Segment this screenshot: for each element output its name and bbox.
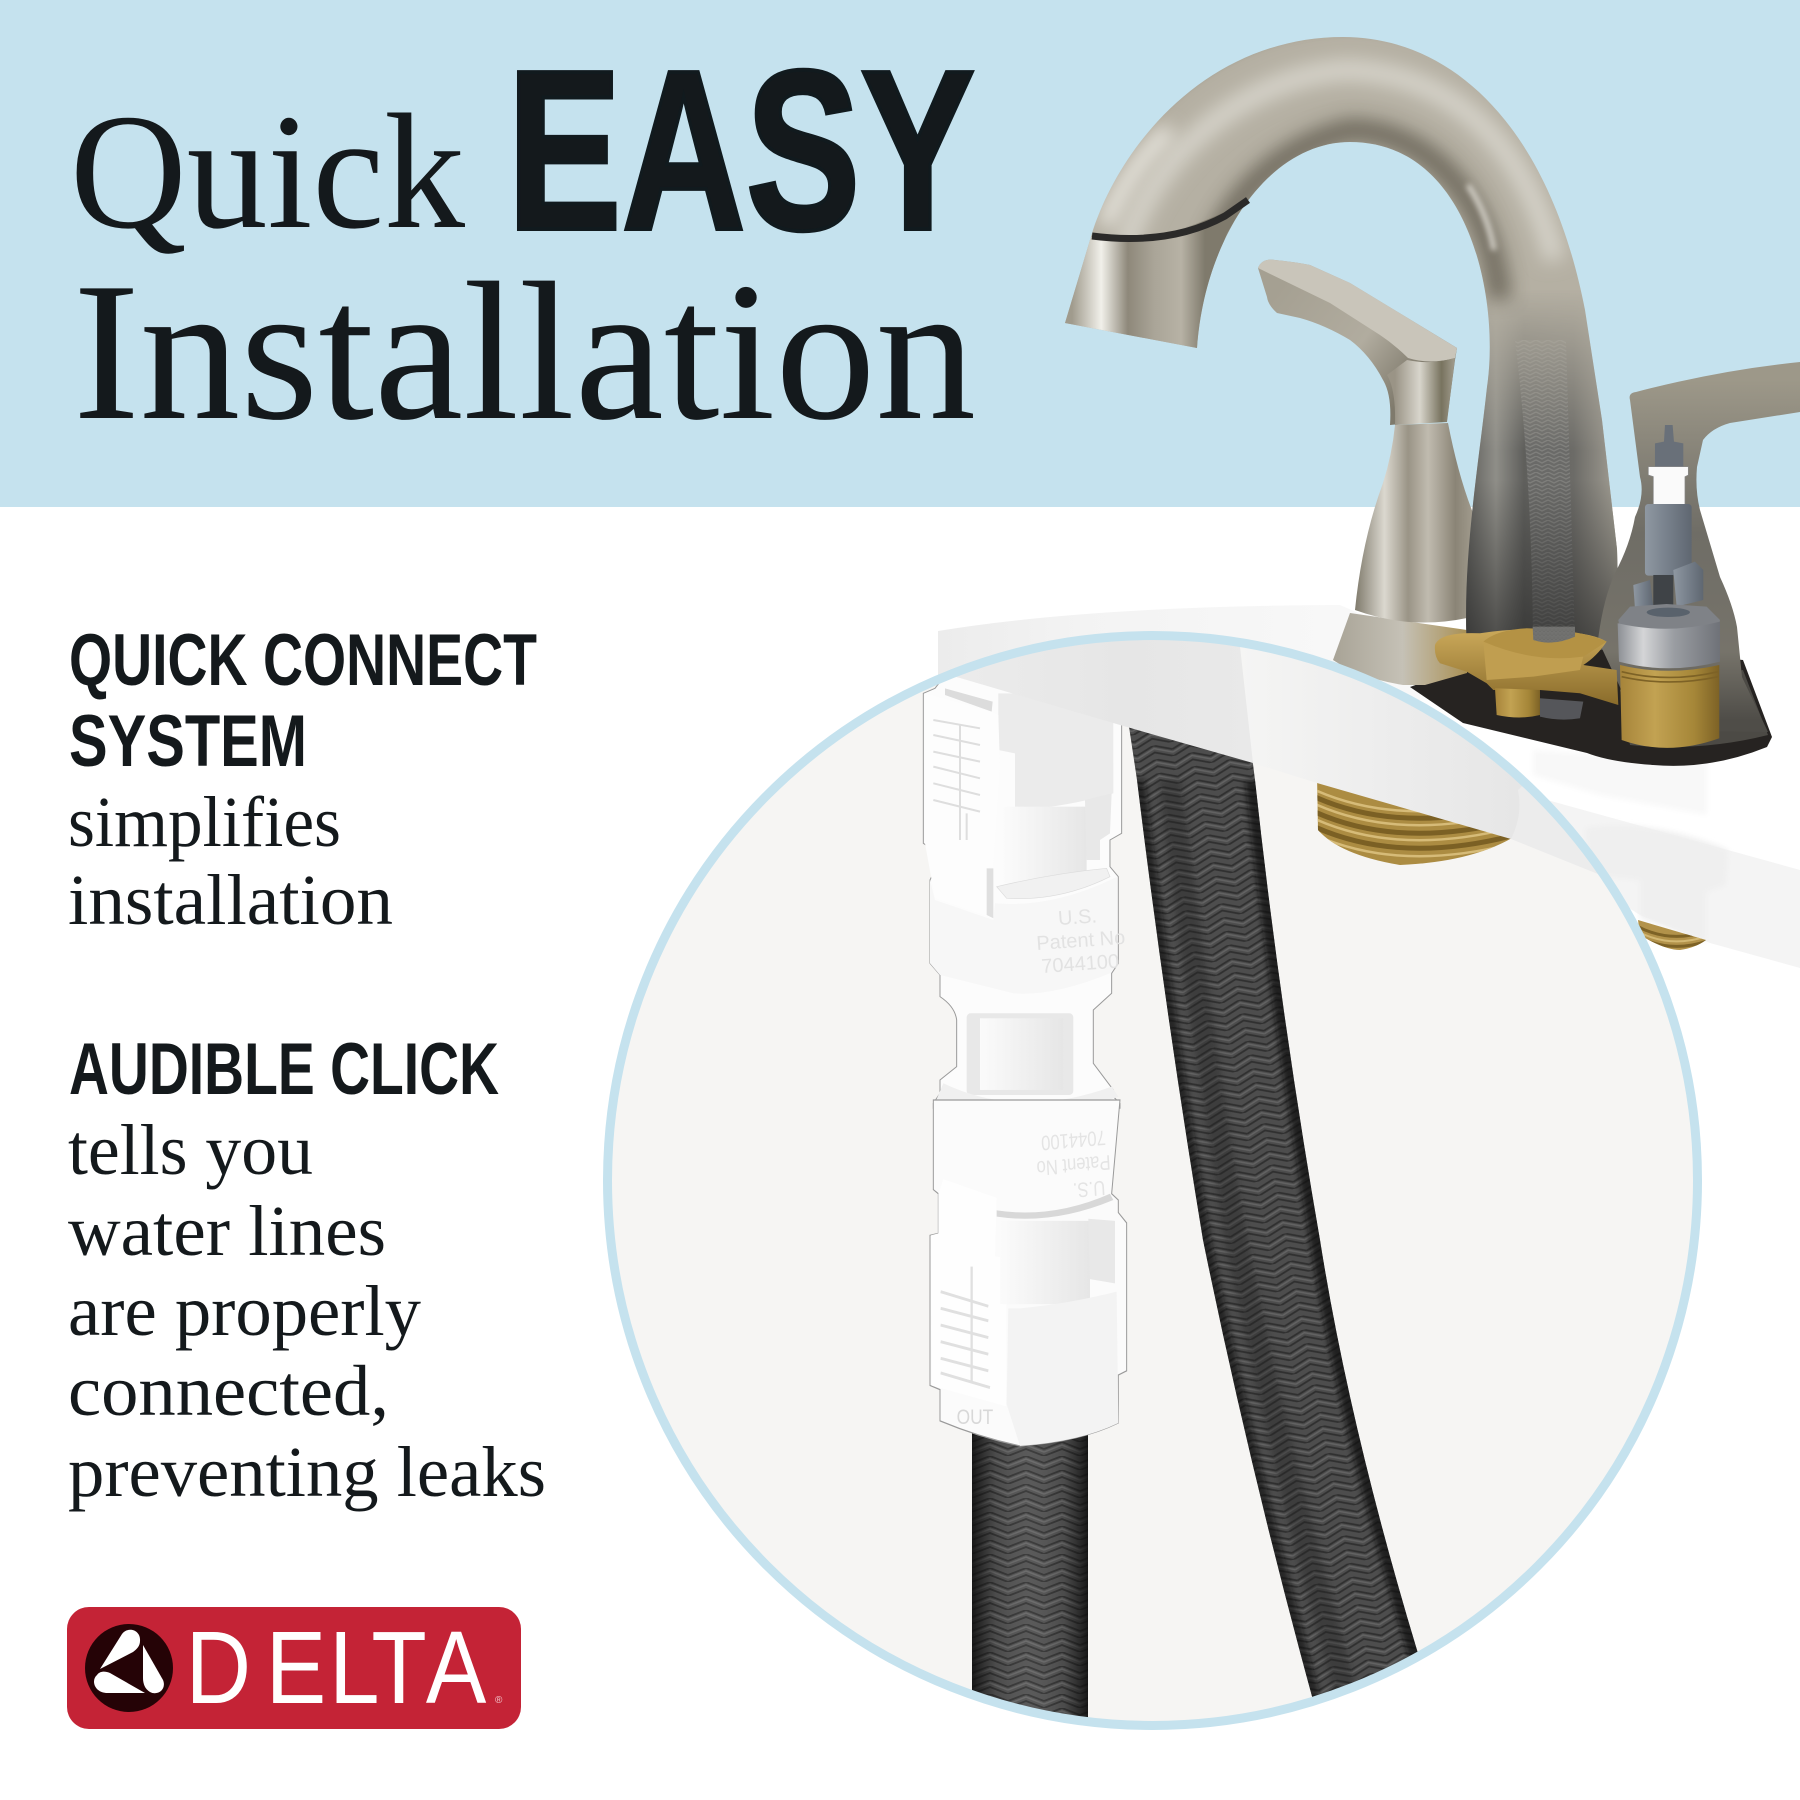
brass manifold [1435,627,1618,720]
connector lettering: 7044100 [1041,951,1120,978]
title: Installation [73,242,976,461]
left handle cone [1355,423,1473,622]
spout [1060,28,1630,670]
text block: audible click: connected, [68,1351,389,1431]
logo: Delta [67,1607,521,1729]
text block: quick connect: SYSTEM [69,701,307,782]
mounting plate [1410,640,1772,766]
counter section behind circle edge [1511,786,1597,874]
text block: quick connect: installation [68,860,393,940]
circle outline [608,636,1698,1726]
connector lettering: Patent No [1036,927,1126,955]
title: Quick [70,80,465,263]
threaded nipple [1317,783,1511,865]
left handle skirt [1333,613,1467,685]
text block: audible click: preventing leaks [68,1432,546,1512]
right handle transparent [1598,362,1800,732]
text block: audible click: water lines [68,1191,386,1271]
connector lower half: OUT [957,1405,993,1430]
text block: quick connect: simplifies [68,782,341,862]
text block: audible click: are properly [68,1271,421,1351]
connector lettering: U.S. [1072,1176,1106,1202]
text block: quick connect: QUICK CONNECT [69,620,537,701]
text block: audible click: AUDIBLE CLICK [69,1029,499,1110]
spout black ring [1092,200,1248,238]
countertop slab section [957,640,1512,839]
connector upper half [923,673,1128,1118]
faucet [1060,28,1800,766]
connector lettering: Patent No [1036,1151,1111,1180]
text block: audible click [68,1029,546,1512]
connector lettering: 7044100 [1040,1126,1106,1155]
logo: Delta: DELTA [186,1610,487,1725]
connector lower half [930,1100,1127,1446]
left handle lever [1258,260,1457,425]
hose: left [972,1430,1088,1730]
hose: right [1129,728,1418,1697]
small thread behind counter [1638,920,1706,950]
plate grey top [1620,670,1768,747]
text block: quick connect [68,620,537,940]
circle contents [923,620,1625,1730]
connector lettering: U.S. [1057,905,1098,930]
connector [923,673,1128,1446]
counter slab outside circle [938,605,1800,968]
logo: Delta: ® [495,1695,503,1706]
text block: audible click: tells you [68,1110,313,1190]
title: EASY [507,24,975,278]
title [70,24,976,461]
cartridge [1618,425,1720,748]
detail circle [608,636,1698,1726]
header band [0,0,1800,507]
